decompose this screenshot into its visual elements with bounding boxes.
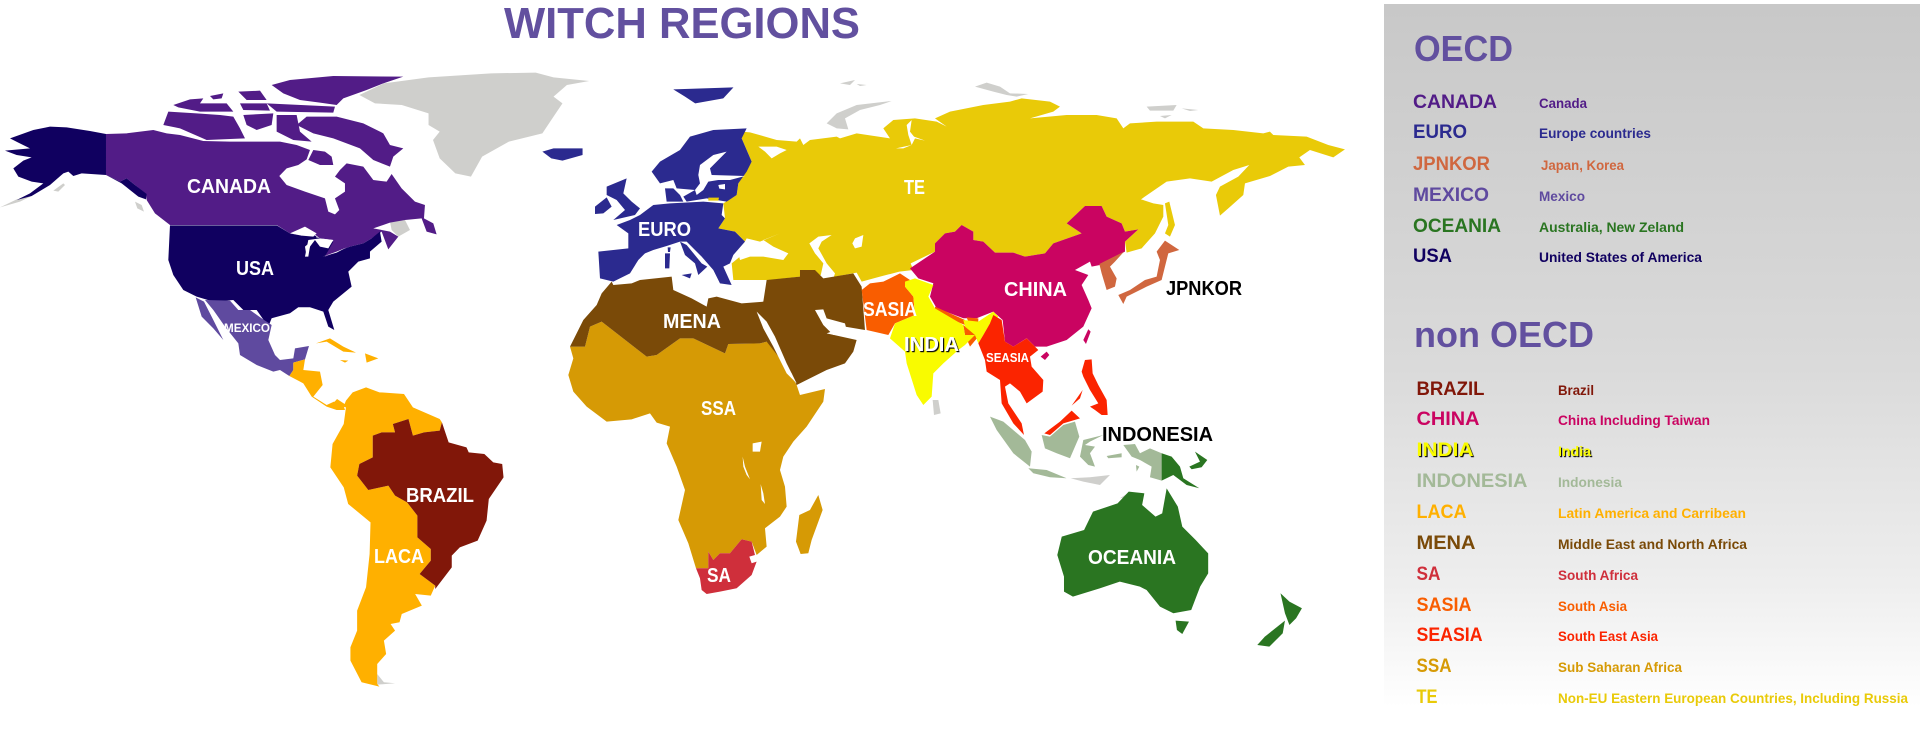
map labels: SASIA: [863, 299, 917, 321]
legend list: non OECD regions: Latin America and Carribean: [1558, 506, 1746, 521]
legend list: non OECD regions: Brazil: [1558, 383, 1594, 398]
legend list: OECD regions: Australia, New Zeland: [1539, 220, 1684, 235]
legend list: OECD regions: Canada: [1539, 96, 1587, 111]
region: USA: [5, 127, 382, 330]
legend list: non OECD regions: LACA: [1416, 502, 1467, 523]
map labels: SSA: [701, 398, 736, 420]
legend list: OECD regions: USA: [1413, 246, 1452, 267]
white inland seas: [738, 120, 925, 278]
heading: non OECD: non OECD: [1414, 314, 1594, 355]
map labels: SEASIA: [986, 350, 1030, 365]
legend list: non OECD regions: Indonesia: [1558, 475, 1622, 490]
legend list: non OECD regions: [1416, 379, 1908, 708]
legend list: non OECD regions: China Including Taiwan: [1558, 413, 1710, 428]
map labels: INDONESIA: [1102, 424, 1213, 446]
map labels: MEXICO: [224, 321, 270, 335]
legend list: non OECD regions: SASIA: [1416, 595, 1472, 616]
legend list: non OECD regions: SSA: [1416, 656, 1452, 677]
panel: legend: [1384, 4, 1920, 729]
legend list: non OECD regions: South Africa: [1558, 568, 1638, 583]
region: MENA: [570, 270, 865, 385]
region: INDONESIA: [990, 417, 1162, 481]
region: TE: [718, 98, 1345, 282]
legend list: OECD regions: [1413, 92, 1702, 267]
map labels: USA: [236, 258, 274, 280]
white great lakes: [290, 227, 347, 257]
map labels: EURO: [638, 219, 691, 241]
legend list: OECD regions: EURO: [1413, 122, 1467, 143]
map labels: INDIA: [904, 334, 959, 356]
region: INDIA: [890, 278, 998, 405]
legend list: non OECD regions: India: [1558, 444, 1592, 459]
legend list: non OECD regions: BRAZIL: [1416, 379, 1485, 400]
legend list: OECD regions: Mexico: [1539, 189, 1585, 204]
region: SASIA: [862, 273, 978, 347]
map labels: [187, 176, 1242, 587]
legend list: non OECD regions: Sub Saharan Africa: [1558, 660, 1682, 675]
region: SA: [696, 539, 757, 594]
region: CHINA: [910, 206, 1138, 360]
legend list: non OECD regions: CHINA: [1416, 409, 1480, 430]
map labels: MENA: [663, 311, 721, 333]
legend list: non OECD regions: TE: [1416, 687, 1438, 708]
legend list: OECD regions: JPNKOR: [1413, 154, 1490, 175]
region: LACA: [289, 338, 442, 687]
legend list: OECD regions: United States of America: [1539, 250, 1702, 265]
legend list: non OECD regions: SA: [1416, 564, 1441, 585]
legend list: OECD regions: OCEANIA: [1413, 216, 1501, 237]
legend list: OECD regions: CANADA: [1413, 92, 1497, 113]
region: MEXICO: [196, 297, 309, 376]
legend list: non OECD regions: INDIA: [1416, 440, 1474, 461]
title: WITCH REGIONS: [504, 0, 860, 48]
region: CANADA: [106, 76, 437, 257]
heading: OECD: OECD: [1414, 28, 1513, 69]
legend list: OECD regions: Europe countries: [1539, 126, 1651, 141]
region: EURO: [542, 87, 752, 285]
legend list: non OECD regions: Non-EU Eastern European Countries, Including Russia: [1558, 691, 1908, 706]
legend list: OECD regions: MEXICO: [1413, 185, 1489, 206]
legend list: non OECD regions: Middle East and North Africa: [1558, 537, 1747, 552]
legend list: non OECD regions: INDONESIA: [1416, 471, 1528, 492]
map labels: CANADA: [187, 176, 271, 198]
map labels: SA: [707, 565, 731, 587]
legend list: non OECD regions: SEASIA: [1416, 625, 1483, 646]
map labels: CHINA: [1004, 279, 1067, 301]
white lakes: [743, 442, 765, 504]
world map: [0, 73, 1345, 687]
white gulf of Bothnia: [695, 152, 745, 195]
map labels: OCEANIA: [1088, 547, 1176, 569]
legend list: non OECD regions: South Asia: [1558, 599, 1627, 614]
legend list: non OECD regions: South East Asia: [1558, 629, 1658, 644]
legend list: OECD regions: Japan, Korea: [1541, 158, 1624, 173]
region: non-modelled land (grey): [0, 73, 1198, 685]
region: JPNKOR: [1099, 241, 1179, 304]
region: SSA: [568, 322, 825, 568]
legend list: non OECD regions: MENA: [1416, 533, 1476, 554]
region: BRAZIL: [357, 419, 504, 589]
map labels: TE: [904, 177, 925, 199]
map labels: JPNKOR: [1166, 278, 1242, 300]
region: SEASIA: [978, 315, 1108, 435]
region: OCEANIA: [1057, 452, 1302, 647]
map labels: BRAZIL: [406, 485, 474, 507]
map labels: LACA: [374, 546, 424, 568]
